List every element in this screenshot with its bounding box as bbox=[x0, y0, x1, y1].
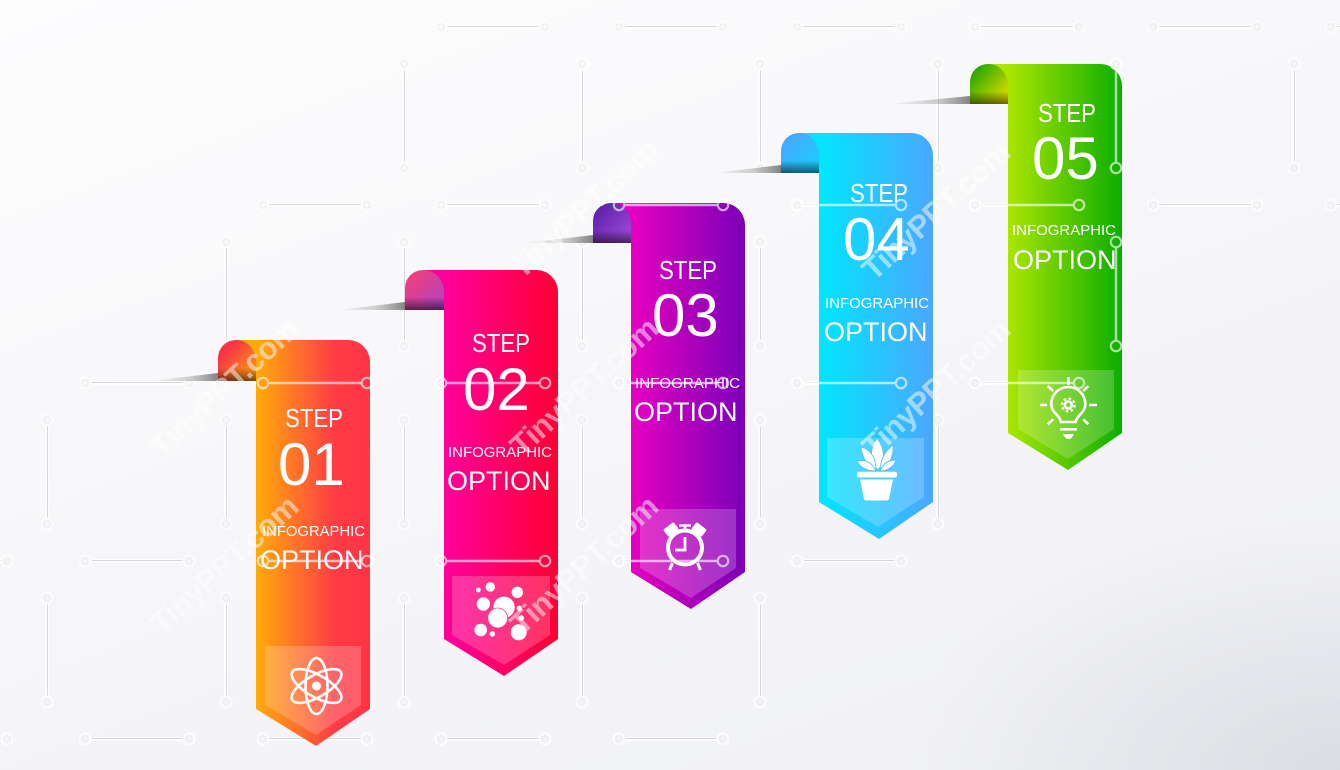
panel: step 05 ribbon bbox=[887, 64, 1122, 470]
panel: step 05 ribbon: STEP bbox=[1038, 100, 1096, 128]
watermarks: TinyPPT.com bbox=[143, 311, 305, 464]
panel: step 02 ribbon: OPTION bbox=[447, 466, 551, 496]
connector lines over ribbons bbox=[258, 59, 1121, 566]
watermarks: TinyPPT.com bbox=[503, 132, 665, 285]
panel: step 03 ribbon: STEP bbox=[659, 257, 717, 285]
panel: step 04 ribbon: OPTION bbox=[824, 317, 928, 347]
panel: step 04 ribbon bbox=[713, 133, 933, 539]
panel: step 03 ribbon bbox=[525, 203, 745, 609]
panel: step 02 ribbon: STEP bbox=[472, 330, 530, 358]
panel: step 02 ribbon: 02 bbox=[463, 356, 530, 423]
watermarks: TinyPPT.com bbox=[503, 488, 665, 641]
panel: step 01 ribbon bbox=[150, 340, 370, 746]
panel: step 01 ribbon: INFOGRAPHIC bbox=[262, 523, 365, 540]
panel: step 03 ribbon: OPTION bbox=[634, 397, 738, 427]
panel: step 04 ribbon: INFOGRAPHIC bbox=[825, 295, 929, 312]
panel: step 01 ribbon: STEP bbox=[285, 405, 343, 433]
panel: step 03 ribbon: INFOGRAPHIC bbox=[635, 375, 740, 392]
panel: step 05 ribbon: OPTION bbox=[1013, 245, 1117, 275]
watermarks: TinyPPT.com bbox=[503, 310, 665, 463]
watermarks: TinyPPT.com bbox=[855, 311, 1017, 464]
panel: step 04 ribbon: 04 bbox=[843, 206, 910, 273]
watermarks bbox=[143, 132, 1017, 641]
panel: step 01 ribbon: 01 bbox=[278, 431, 345, 498]
panel: step 02 ribbon bbox=[337, 270, 558, 676]
panel: step 05 ribbon: INFOGRAPHIC bbox=[1012, 222, 1116, 239]
panel: step 03 ribbon: 03 bbox=[652, 282, 719, 349]
watermarks: TinyPPT.com bbox=[143, 488, 305, 641]
panel: step 05 ribbon: 05 bbox=[1032, 125, 1099, 192]
panel: step 04 ribbon: STEP bbox=[850, 180, 908, 208]
panel: step 01 ribbon: OPTION bbox=[260, 545, 364, 575]
panel: step 02 ribbon: INFOGRAPHIC bbox=[448, 444, 552, 461]
watermarks: TinyPPT.com bbox=[855, 134, 1017, 287]
